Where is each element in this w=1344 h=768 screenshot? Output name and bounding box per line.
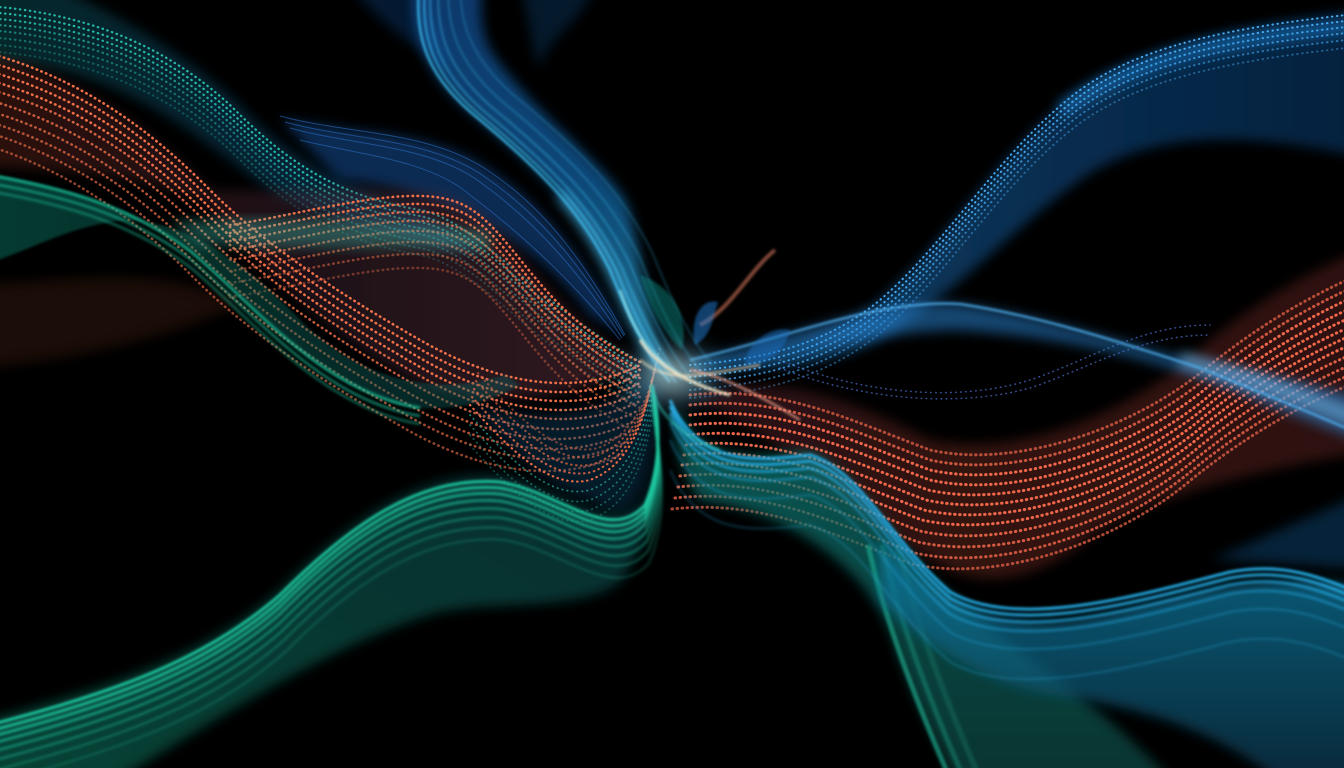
bright blue strands xyxy=(670,400,1344,679)
blue mid strands xyxy=(280,116,625,340)
central glow knot xyxy=(612,290,800,450)
ribbon: dark blue far right xyxy=(1210,490,1344,570)
ribbon: blue upper right xyxy=(690,8,1344,398)
ribbon: faint orange far left xyxy=(0,278,240,368)
orange dotted strands xyxy=(0,48,640,471)
teal dotted strands xyxy=(0,5,640,407)
glowing right end xyxy=(1180,358,1344,425)
ribbon: red right xyxy=(672,245,1344,578)
blue leaves right of centre xyxy=(694,302,790,365)
ribbon: faint blue upper strands xyxy=(345,0,595,70)
ribbon: orange left xyxy=(0,48,640,471)
ribbon: blue top centre xyxy=(414,0,712,382)
ribbon: green bottom left xyxy=(0,385,662,768)
red dotted strands xyxy=(672,268,1344,569)
bright thin line xyxy=(690,303,1344,440)
ribbon: green left xyxy=(0,170,520,424)
ribbon: blue-teal bottom right xyxy=(670,400,1344,768)
teal dotted fan xyxy=(470,388,652,522)
ribbon: teal strand bottom centre xyxy=(675,405,1180,768)
ribbon: dark blue mid left xyxy=(280,116,625,340)
soft bright upper edge xyxy=(1060,25,1344,110)
green strand lines xyxy=(0,385,662,768)
green leaf above centre xyxy=(640,275,684,350)
translucent teal veil across orange xyxy=(170,219,490,250)
blue top bright lines xyxy=(418,0,712,382)
small orange curl above centre xyxy=(700,250,775,325)
ribbon: teal top left xyxy=(0,0,640,407)
ribbon: thin blue right xyxy=(690,303,1344,445)
bright teal edge xyxy=(868,545,985,768)
blue top glowing lower section xyxy=(560,195,660,370)
blue dotted strands xyxy=(690,12,1344,398)
fan dotted strands xyxy=(470,346,660,482)
ribbon: thin dark blue lower right wisp xyxy=(780,325,1210,399)
green strand lines xyxy=(0,172,420,424)
ribbon: fan under centre xyxy=(470,346,660,522)
